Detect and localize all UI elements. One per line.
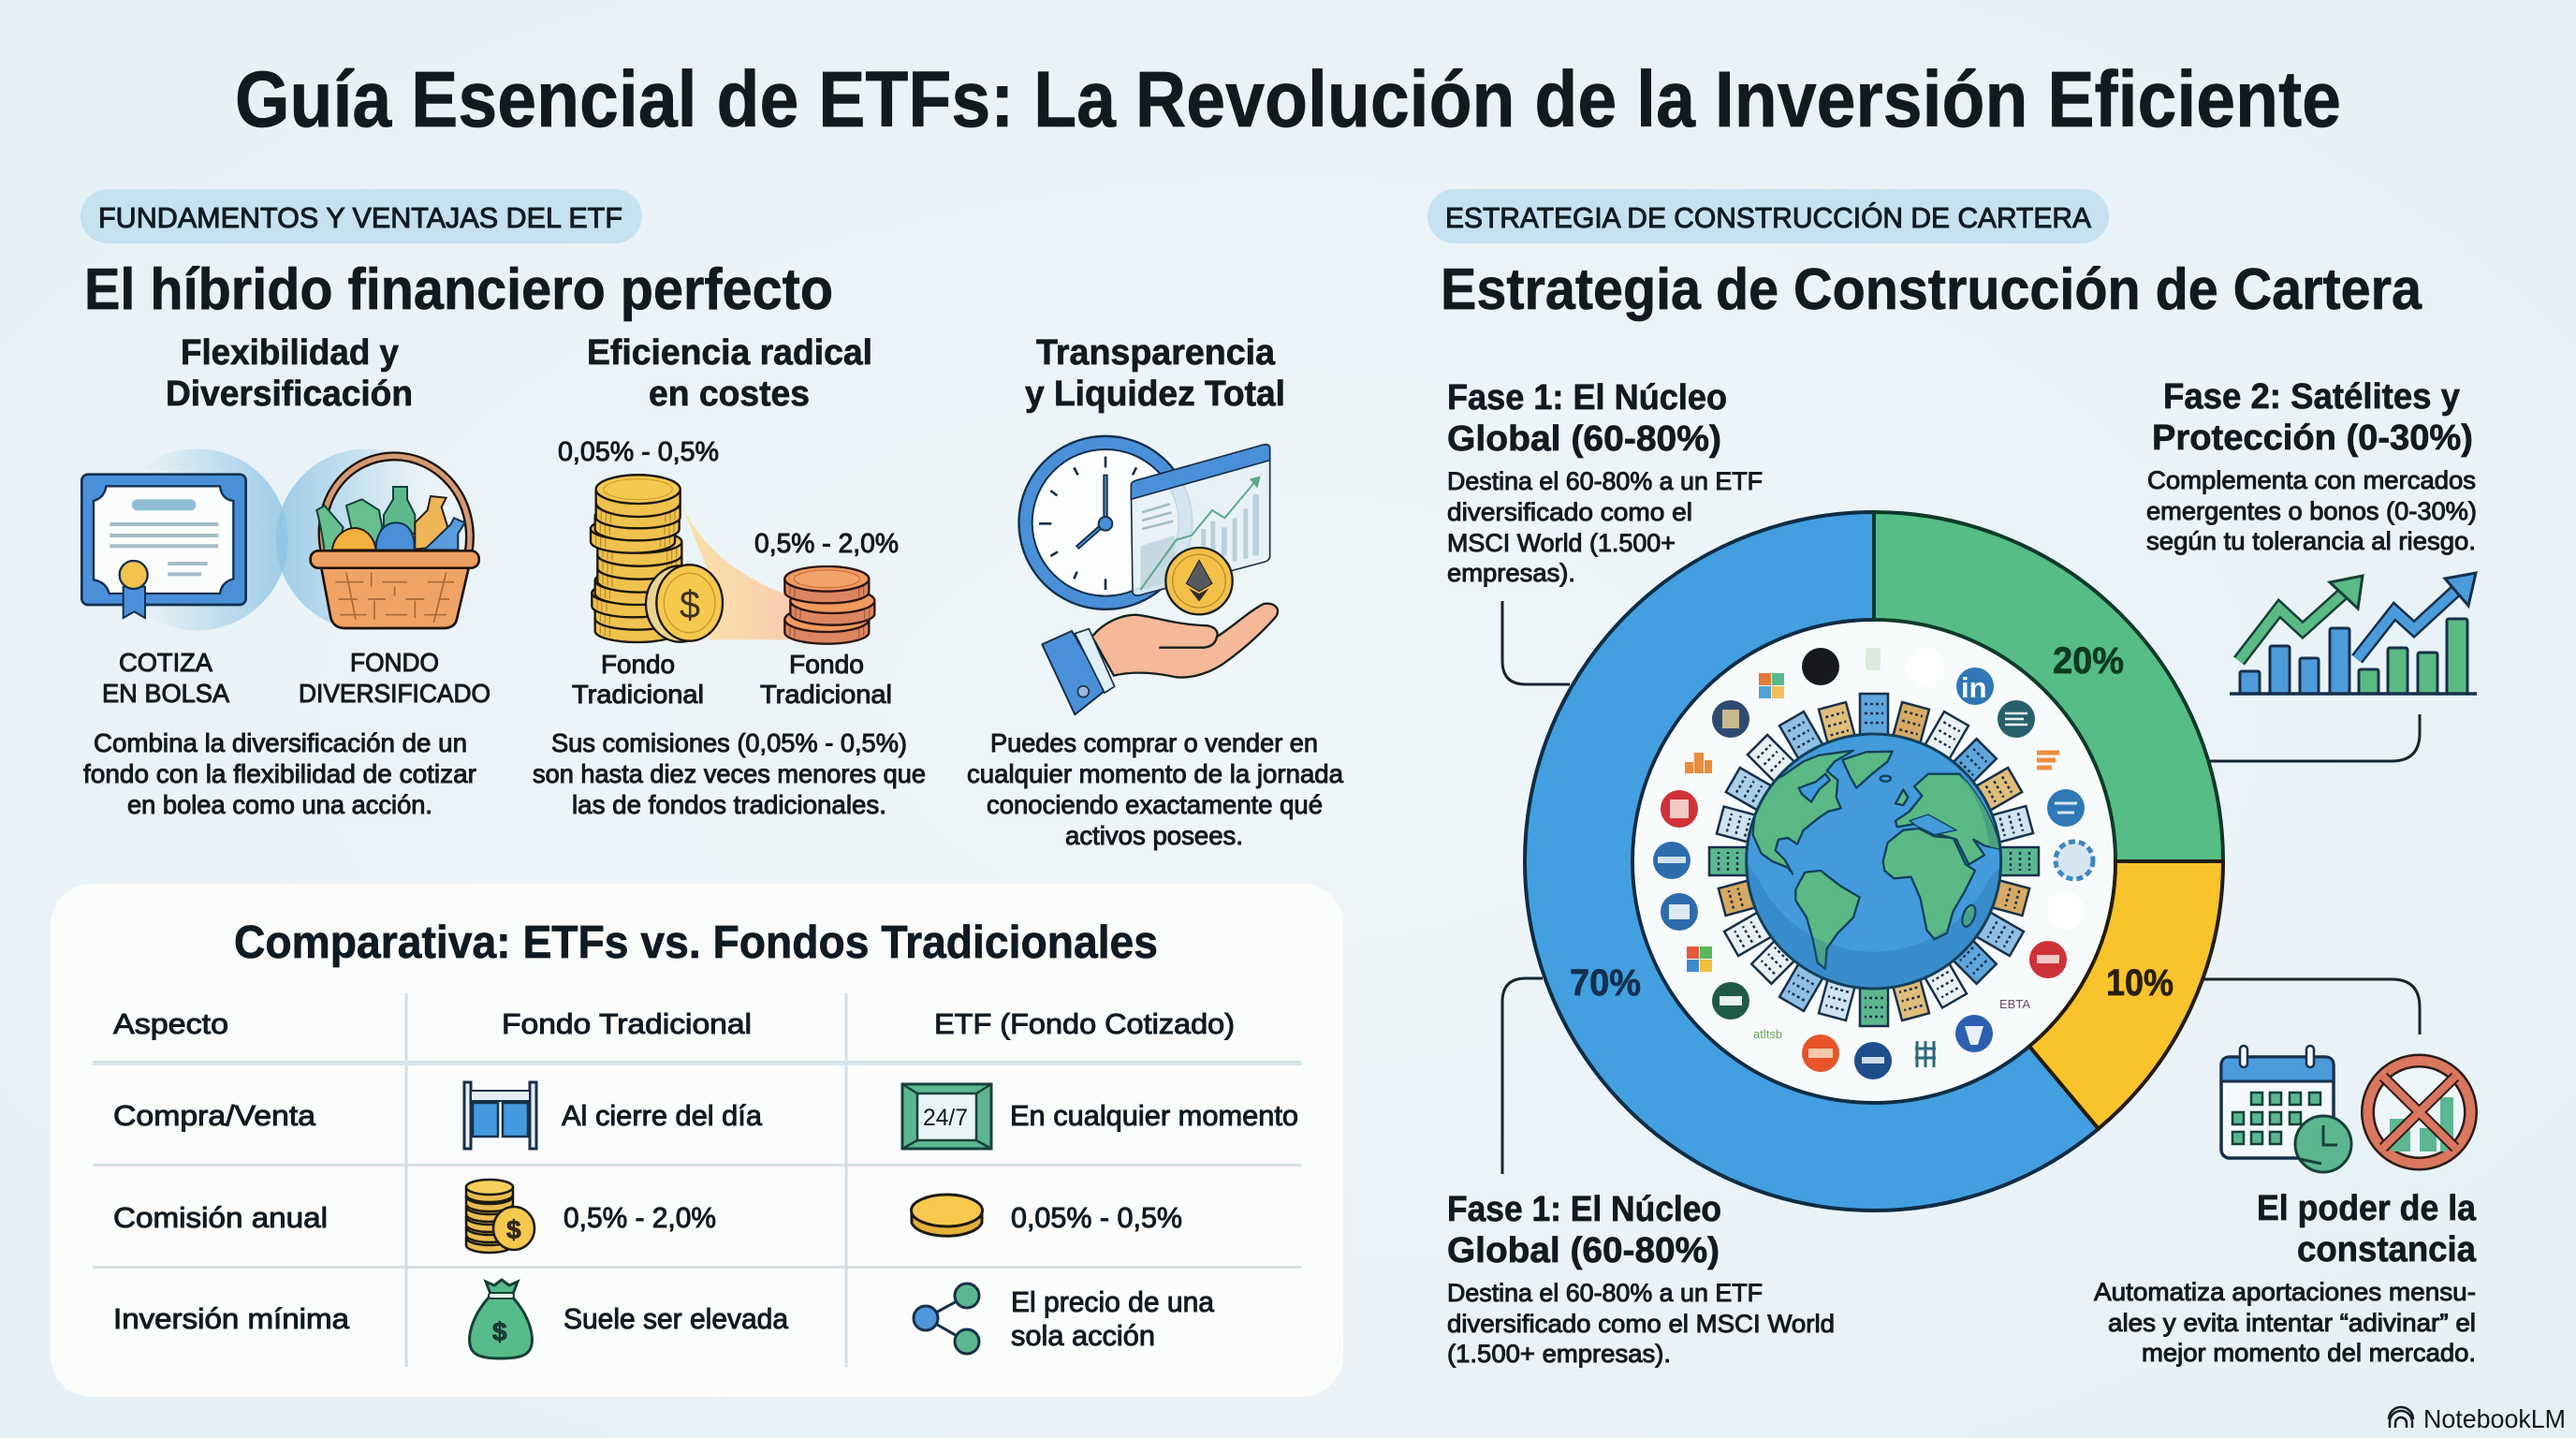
callout: constancia: Automatiza aportaciones mensu- <box>2094 1278 2476 1306</box>
text block: transparencia: conociendo exactamente qué <box>987 790 1323 819</box>
text block: comisiones: son hasta diez veces menores que <box>533 759 926 788</box>
icon: dollar coin <box>646 565 723 642</box>
column heading <box>1025 333 1285 414</box>
value: 10%: 10% <box>2106 962 2174 1004</box>
callout: fase 1 top: Destina el 60-80% a un ETF <box>1447 467 1763 495</box>
icon: open 24/7: 24/7 <box>923 1105 968 1131</box>
segment: green 20% <box>1874 512 2223 861</box>
segment: blue 70% <box>1525 512 2099 1211</box>
text block: comisiones <box>533 728 926 819</box>
text block: transparencia: cualquier momento de la jornada <box>967 759 1343 788</box>
labels: fondo diversificado: DIVERSIFICADO <box>299 679 490 708</box>
icon: ethereum coin <box>1165 548 1233 614</box>
company logos ring: in <box>1961 671 1987 704</box>
text block: flexibilidad: Combina la diversificación de un <box>94 728 467 757</box>
value: 70%: 70% <box>1570 962 1641 1004</box>
icon: coin stack: $ <box>506 1215 521 1244</box>
cost slope shading <box>681 506 789 639</box>
callout: constancia: El poder de la <box>2257 1189 2477 1228</box>
callout: fase 2: según tu tolerancia al riesgo. <box>2146 527 2476 555</box>
icon: coin stack <box>466 1180 534 1253</box>
text block: transparencia: activos posees. <box>1065 821 1243 850</box>
icon: tall gold coin stack <box>591 475 681 642</box>
labels: fondo tradicional: Tradicional <box>572 680 704 709</box>
company logos ring: atltsb <box>1753 1027 1782 1041</box>
row: inversión mínima: Inversión mínima <box>113 1302 350 1335</box>
column heading: Transparencia <box>1036 333 1276 373</box>
labels: fondo tradicional: Fondo <box>789 650 864 679</box>
text block: comisiones: las de fondos tradicionales. <box>572 790 886 819</box>
panel: fundamentos y ventajas <box>80 189 1343 850</box>
labels: fondo diversificado <box>299 648 490 708</box>
callout: fase 1 top: diversificado como el <box>1447 498 1692 526</box>
callout: fase 1 top <box>1447 378 1763 587</box>
donut chart <box>1525 512 2223 1211</box>
labels: fondo tradicional <box>572 650 892 709</box>
connector: fase 1 bottom <box>1502 978 1543 1174</box>
callout: fase 1 top: Fase 1: El Núcleo <box>1447 378 1727 418</box>
labels: cotiza en bolsa <box>102 648 229 708</box>
row: inversión mínima: El precio de una <box>1011 1285 1215 1318</box>
row: compra/venta: Al cierre del día <box>562 1099 763 1132</box>
text block: flexibilidad <box>83 728 476 819</box>
table header: Fondo Tradicional <box>502 1007 752 1040</box>
table header <box>113 1007 1235 1040</box>
icon: single coin <box>912 1195 983 1236</box>
company logos ring <box>1653 648 2093 1079</box>
table card <box>51 884 1343 1397</box>
icon: prohibited chart <box>2368 1061 2471 1164</box>
segment: yellow 10% <box>2029 861 2223 1129</box>
value: 20%: 20% <box>2053 640 2124 682</box>
icon: closed doors <box>464 1082 536 1149</box>
section pill: estrategia <box>1427 189 2109 243</box>
row: inversión mínima: Suele ser elevada <box>564 1302 789 1335</box>
icon: small copper coin stack <box>784 566 874 644</box>
callout: constancia <box>2094 1189 2477 1367</box>
icon halos <box>107 448 458 630</box>
section pill: estrategia: ESTRATEGIA DE CONSTRUCCIÓN DE CARTERA <box>1445 201 2091 234</box>
row: compra/venta <box>113 1082 1298 1149</box>
table header: ETF (Fondo Cotizado) <box>934 1007 1235 1040</box>
row: compra/venta: En cualquier momento <box>1010 1099 1298 1132</box>
icon: basket <box>311 456 479 628</box>
icon: browser chart window <box>1131 445 1270 595</box>
title: Guía Esencial de ETFs: La Revolución de la Inversión Eficiente <box>235 55 2341 143</box>
callout: fase 1 bottom: (1.500+ empresas). <box>1447 1340 1671 1368</box>
logo: NotebookLM: NotebookLM <box>2423 1404 2566 1433</box>
callout: fase 2: emergentes o bonos (0-30%) <box>2146 497 2477 525</box>
column heading: Flexibilidad y <box>181 333 399 373</box>
labels: fondo tradicional: Tradicional <box>760 680 892 709</box>
panel: comparison table <box>51 884 1343 1397</box>
labels: fondo tradicional: Fondo <box>601 650 675 679</box>
row: inversión mínima <box>113 1280 1215 1358</box>
globe <box>1741 734 2012 1002</box>
center disc <box>1634 622 2114 1101</box>
callout: fase 1 bottom: diversificado como el MSCI World <box>1447 1310 1835 1338</box>
icon: money bag <box>470 1280 532 1358</box>
column heading <box>166 333 413 414</box>
text block: comisiones: Sus comisiones (0,05% - 0,5%) <box>551 728 907 757</box>
callout: fase 1 top: MSCI World (1.500+ <box>1447 529 1676 557</box>
icon: open 24/7 <box>902 1084 991 1149</box>
company logos ring: EBTA <box>1999 997 2030 1011</box>
icon: share nodes <box>914 1284 979 1354</box>
icon: clock <box>1017 435 1193 610</box>
callout: fase 1 bottom: Fase 1: El Núcleo <box>1447 1190 1721 1229</box>
section pill: fundamentos: FUNDAMENTOS Y VENTAJAS DEL ETF <box>98 201 622 234</box>
icon: certificate <box>81 475 246 618</box>
row: comisión anual: Comisión anual <box>113 1201 328 1234</box>
callout: fase 1 bottom: Destina el 60-80% a un ETF <box>1447 1279 1763 1307</box>
labels: cotiza en bolsa: EN BOLSA <box>102 679 229 708</box>
column heading: Eficiencia radical <box>587 333 872 373</box>
column: eficiencia radical <box>533 333 926 819</box>
text block: flexibilidad: fondo con la flexibilidad de cotizar <box>83 759 476 788</box>
icon: dollar coin: $ <box>680 582 700 626</box>
column heading: en costes <box>649 374 810 414</box>
section pill: fundamentos <box>80 189 642 243</box>
row: inversión mínima: sola acción <box>1011 1319 1155 1352</box>
row: comisión anual: 0,05% - 0,5% <box>1011 1201 1182 1234</box>
buildings ring <box>1709 694 2039 1026</box>
row: comisión anual <box>113 1180 1182 1253</box>
column: flexibilidad y diversificación <box>81 333 490 819</box>
icon: calendar with clock <box>2221 1046 2351 1172</box>
callout: constancia: constancia <box>2297 1230 2477 1269</box>
heading: híbrido financiero: El híbrido financiero perfecto <box>84 257 833 322</box>
connector: fase 1 top <box>1502 601 1570 684</box>
callout: fase 1 bottom: Global (60-80%) <box>1447 1231 1720 1270</box>
callout: fase 2 <box>2146 377 2477 555</box>
column: transparencia y liquidez <box>967 333 1343 850</box>
icon: money bag: $ <box>492 1317 507 1346</box>
callout: fase 1 top: empresas). <box>1447 559 1575 587</box>
row: compra/venta: Compra/Venta <box>113 1099 316 1132</box>
callout: fase 2: Fase 2: Satélites y <box>2163 377 2460 417</box>
text block: transparencia <box>967 728 1343 850</box>
row: comisión anual: 0,5% - 2,0% <box>564 1201 716 1234</box>
column heading: Diversificación <box>166 374 413 414</box>
callout: fase 2: Complementa con mercados <box>2147 466 2476 494</box>
callout: fase 1 top: Global (60-80%) <box>1447 419 1721 459</box>
column heading <box>587 333 872 414</box>
heading: estrategia: Estrategia de Construcción de Cartera <box>1441 257 2422 322</box>
text block: flexibilidad: en bolea como una acción. <box>127 790 432 819</box>
table title: Comparativa: ETFs vs. Fondos Tradicionales <box>234 917 1158 968</box>
connector: fase 2 <box>2209 714 2420 761</box>
value: 0,5% - 2,0%: 0,5% - 2,0% <box>754 529 899 559</box>
callout: constancia: mejor momento del mercado. <box>2142 1339 2476 1367</box>
labels: fondo diversificado: FONDO <box>350 648 439 677</box>
callout: constancia: ales y evita intentar “adivinar” el <box>2108 1309 2476 1337</box>
panel: estrategia de cartera <box>1427 189 2477 1368</box>
text block: transparencia: Puedes comprar o vender en <box>990 728 1318 757</box>
icon: open hand <box>1042 604 1278 714</box>
labels: cotiza en bolsa: COTIZA <box>119 648 212 677</box>
callout: fase 2: Protección (0-30%) <box>2152 418 2473 458</box>
callout: fase 1 bottom <box>1447 1190 1835 1368</box>
column heading: y Liquidez Total <box>1025 374 1285 414</box>
connector: constancia <box>2202 979 2420 1034</box>
icon: growth bar chart <box>2230 573 2477 694</box>
value: 0,05% - 0,5%: 0,05% - 0,5% <box>558 437 719 467</box>
table header: Aspecto <box>113 1007 228 1040</box>
